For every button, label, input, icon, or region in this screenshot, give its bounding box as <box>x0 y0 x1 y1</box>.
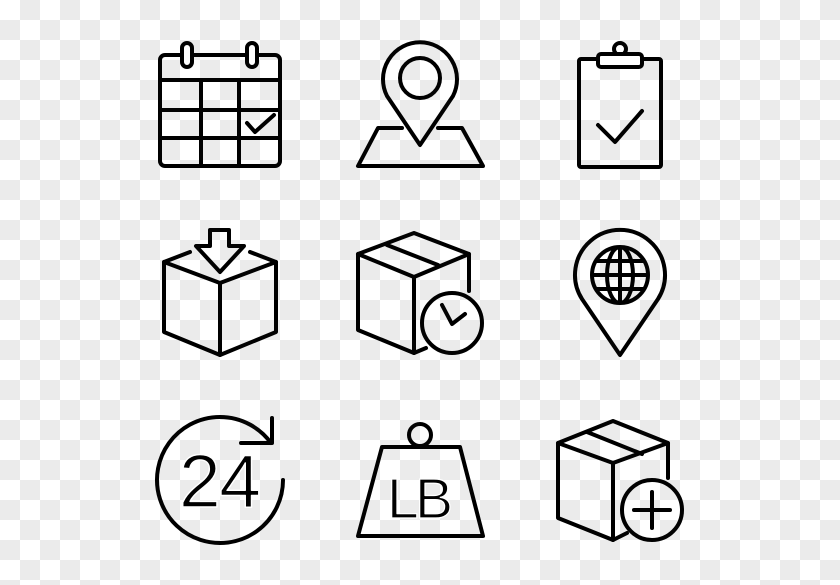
icon: 24 hours <box>157 417 283 543</box>
icon: globe location pin <box>575 230 665 355</box>
icon: box with clock <box>358 233 482 353</box>
icon: LB weight: LB <box>387 467 453 531</box>
icon: calendar <box>160 43 280 166</box>
icon: box with plus <box>558 421 682 540</box>
icon: box with down arrow <box>164 230 276 355</box>
icon: LB weight <box>358 424 483 536</box>
icon: clipboard <box>579 43 661 167</box>
icon: map pin <box>358 42 483 166</box>
icon: 24 hours: 24 <box>179 439 261 523</box>
